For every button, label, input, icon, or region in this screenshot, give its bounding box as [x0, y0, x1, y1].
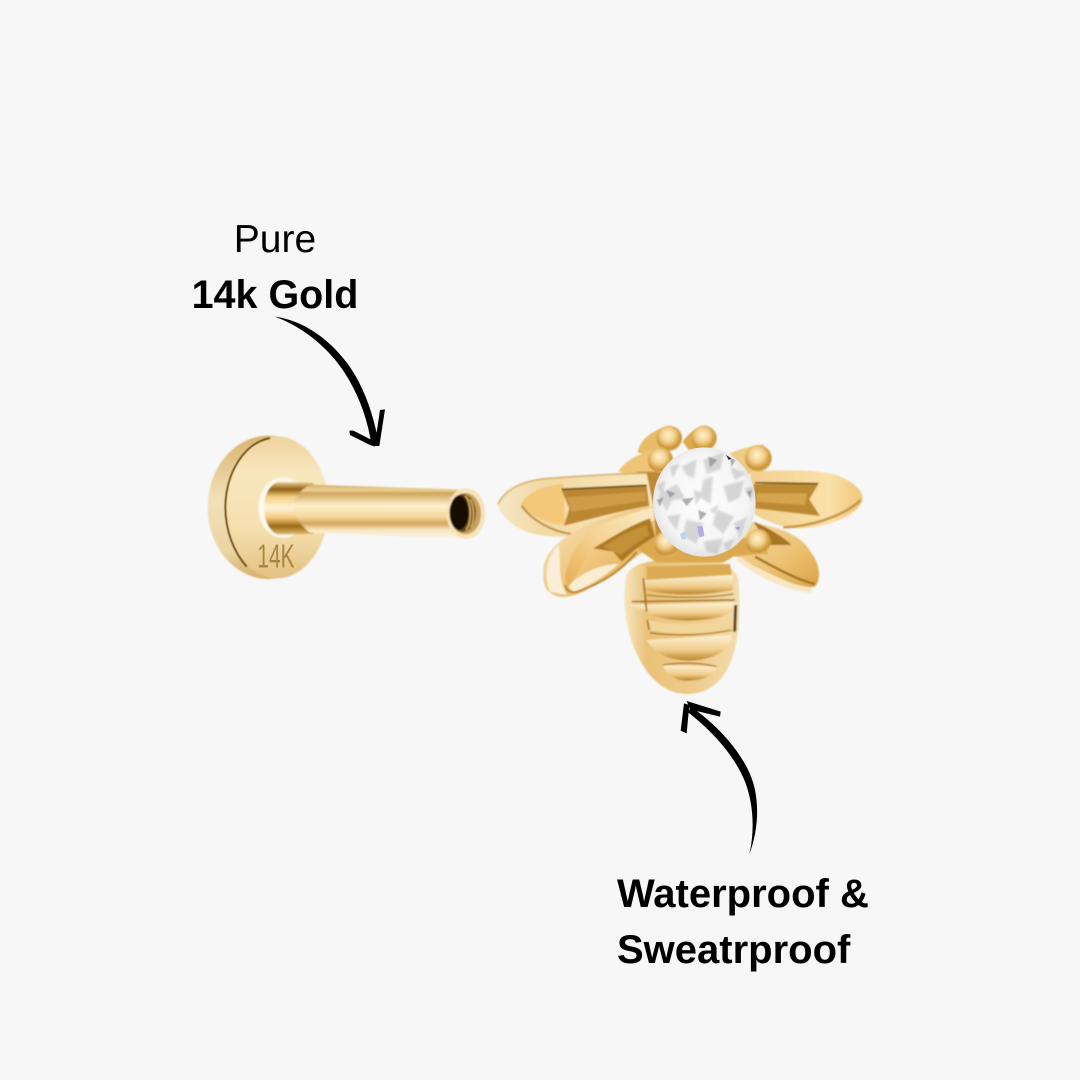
label: Waterproof & Sweatrproof: Sweatrproof — [617, 928, 851, 972]
right upper wing — [750, 470, 862, 528]
left lower wing cream oval — [568, 564, 618, 592]
neck — [264, 482, 313, 535]
back disc — [208, 436, 329, 579]
collar under crystal — [637, 537, 768, 563]
neck rim — [258, 477, 309, 538]
top back wings and prong stems — [638, 426, 678, 455]
left lower wing recess — [593, 518, 655, 562]
engraved 14K mark: 14K — [257, 538, 295, 575]
product: barbell post with 14K disc — [208, 436, 485, 579]
arrow: from waterproof label to the bee — [681, 701, 757, 854]
prong balls — [657, 426, 682, 451]
bee abdomen — [624, 559, 739, 694]
left upper wing ridge — [522, 506, 572, 534]
disc edge line — [225, 438, 270, 567]
arrow: from 14k Gold label to the post — [275, 317, 385, 447]
body of wings behind gem — [637, 472, 663, 553]
front disc face — [225, 436, 328, 578]
label: Pure 14k Gold: 14k Gold — [192, 273, 358, 317]
left lower wing — [543, 507, 657, 597]
left upper wing recess — [562, 485, 649, 526]
left upper wing — [497, 473, 653, 537]
label: Waterproof & Sweatrproof — [617, 872, 869, 972]
label: Waterproof & Sweatrproof: Waterproof & — [617, 872, 869, 916]
label: Pure 14k Gold: Pure — [234, 218, 316, 261]
right lower wing — [737, 522, 819, 587]
label: Pure 14k Gold — [192, 218, 358, 317]
threaded hole — [449, 494, 476, 532]
end ring — [447, 488, 485, 539]
abdomen ribs — [644, 575, 733, 594]
product: gold bee stud with crystal — [497, 425, 862, 694]
post shaft — [293, 485, 458, 539]
left upper wing top edge — [498, 473, 647, 504]
crystal gemstone — [653, 447, 756, 557]
